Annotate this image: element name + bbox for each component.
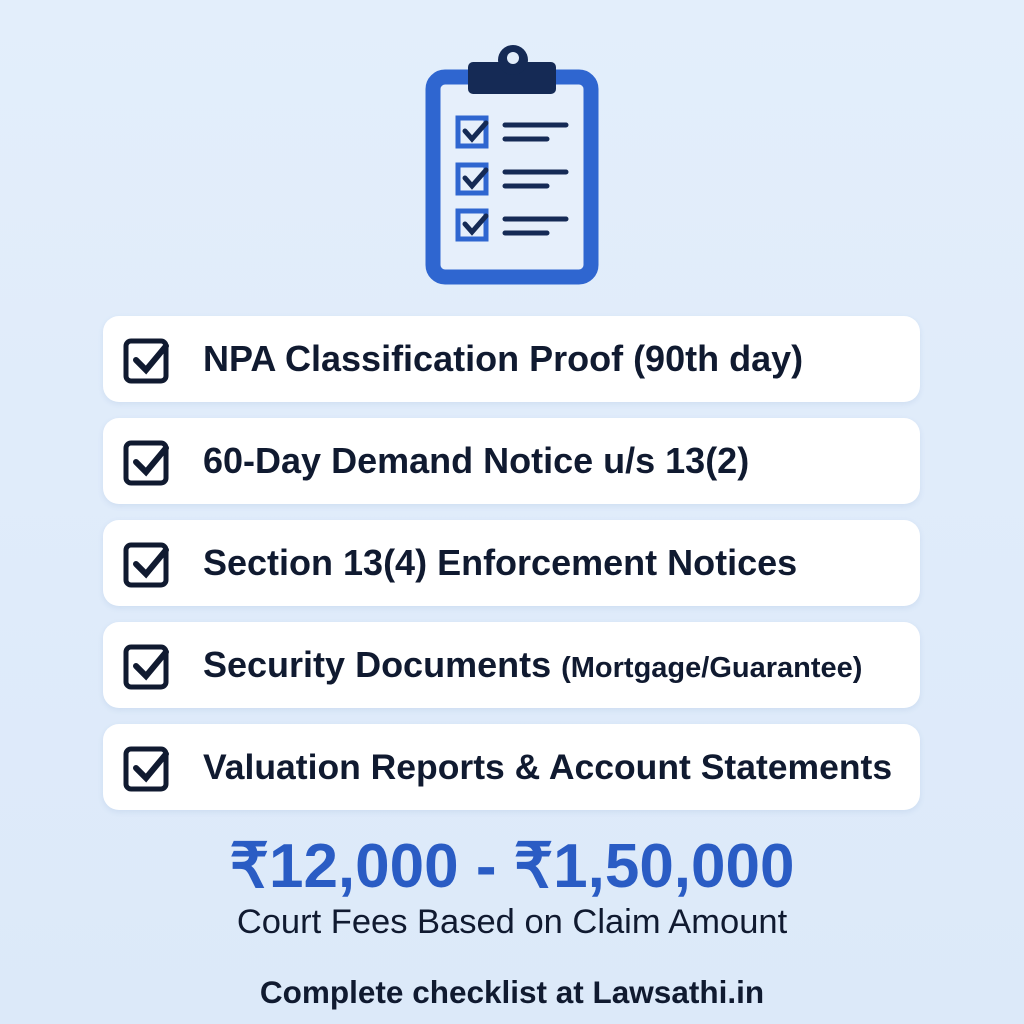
price range: ₹12,000 - ₹1,50,000 [230,832,794,901]
card: enforcement notices: Section 13(4) Enforcement Notices [203,542,797,583]
card: security documents [103,622,920,708]
card: enforcement notices [103,520,920,606]
card: security documents: Security Documents (Mortgage/Guarantee) [203,644,862,685]
card: NPA classification [103,316,920,402]
card: valuation reports: Valuation Reports & Account Statements [203,747,892,787]
subtitle: Court Fees Based on Claim Amount [237,903,787,941]
card: demand notice [103,418,920,504]
icon: clipboard [426,45,598,284]
footer: Complete checklist at Lawsathi.in [260,974,764,1010]
card: valuation reports [103,724,920,810]
card: demand notice: 60-Day Demand Notice u/s 13(2) [203,440,749,481]
card: NPA classification: NPA Classification Proof (90th day) [203,338,803,379]
